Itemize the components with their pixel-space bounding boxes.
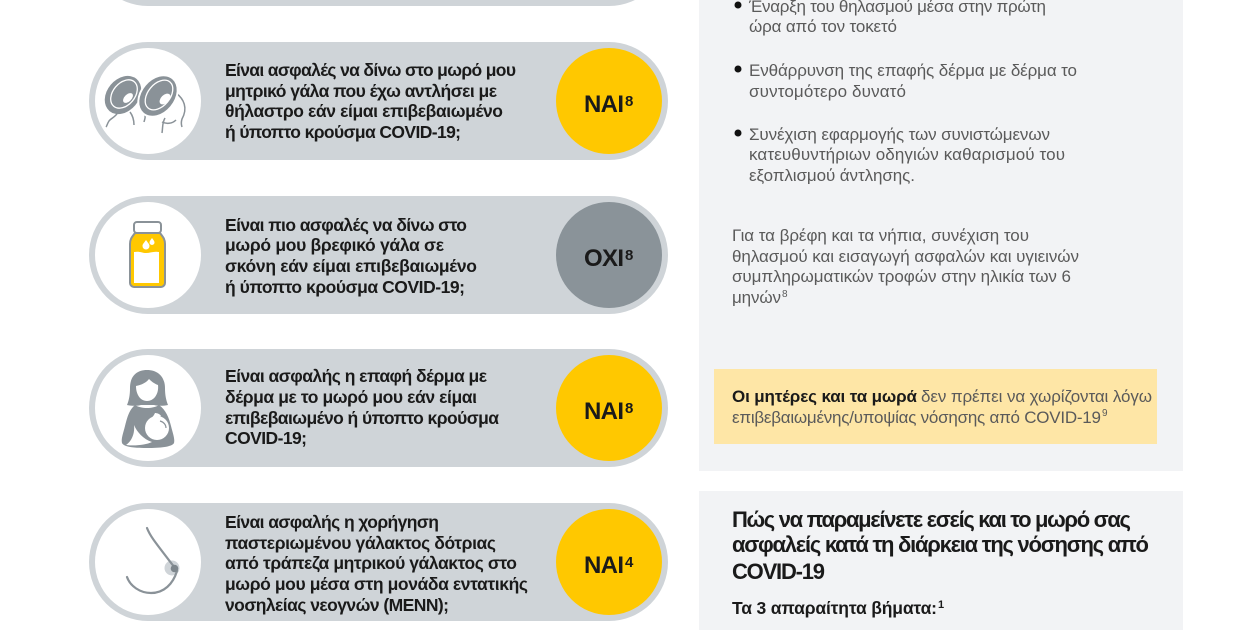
answer: yes: ΝΑΙ — [584, 398, 624, 425]
heading: ασφαλείς κατά τη διάρκεια της νόσησης από — [732, 532, 1149, 557]
question text: παστεριωμένου γάλακτος δότριας — [225, 533, 496, 553]
partial pill cut off at top — [89, 0, 668, 6]
question text: μωρό μου μέσα στη μονάδα εντατικής — [225, 574, 528, 594]
question text: μητρικό γάλα που έχω αντλήσει με — [225, 81, 498, 101]
answer: yes: 4 — [625, 554, 634, 571]
panel: staying safe — [699, 491, 1183, 630]
paragraph: infants and toddlers: Για τα βρέφη και τα νήπια, συνέχιση του — [732, 226, 1029, 245]
callout: δεν πρέπει να χωρίζονται λόγω — [921, 387, 1152, 406]
bullet list: κατευθυντήριων οδηγιών καθαρισμού του — [749, 145, 1065, 164]
question text — [225, 512, 528, 615]
question text: ή ύποπτο κρούσμα COVID-19; — [225, 277, 465, 297]
panel: donor milk question — [89, 503, 668, 621]
subheading: 1 — [938, 599, 944, 611]
bullet list: ώρα από τον τοκετό — [749, 17, 897, 36]
question text — [225, 60, 516, 142]
question text: σκόνη εάν είμαι επιβεβαιωμένο — [225, 256, 477, 276]
callout: Οι μητέρες και τα μωρά — [732, 387, 918, 406]
paragraph: infants and toddlers: θηλασμού και εισαγωγή ασφαλών και υγιεινών — [732, 247, 1079, 266]
question text: δέρμα με το μωρό μου εάν είμαι — [225, 387, 477, 407]
panel: formula question — [89, 196, 668, 314]
answer: no: ΟΧΙ — [584, 245, 624, 272]
callout: 9 — [1102, 408, 1108, 419]
paragraph: infants and toddlers: μηνών — [732, 288, 781, 307]
panel: skin to skin question — [89, 349, 668, 467]
icon: bottle — [130, 222, 165, 287]
icon: breast pump — [97, 66, 187, 133]
answer: no: 8 — [625, 247, 633, 264]
answer: no — [556, 202, 662, 308]
bullet list — [734, 0, 1077, 185]
callout — [714, 369, 1157, 444]
question text: Είναι ασφαλής η επαφή δέρμα με — [225, 366, 488, 386]
question text — [225, 366, 499, 448]
answer: yes — [556, 355, 662, 461]
panel: recommendations — [699, 0, 1183, 471]
question text: από τράπεζα μητρικού γάλακτος στο — [225, 553, 517, 574]
panel: breast pump question — [89, 42, 668, 160]
paragraph: infants and toddlers — [732, 226, 1079, 307]
question text: Είναι πιο ασφαλές να δίνω στο — [225, 215, 467, 235]
heading: COVID-19 — [732, 559, 825, 584]
icon: mother and baby — [122, 370, 174, 448]
icon: breast — [127, 528, 180, 593]
answer: yes: ΝΑΙ — [584, 91, 624, 118]
question text: COVID-19; — [225, 428, 307, 448]
paragraph: infants and toddlers: συμπληρωματικών τροφών στην ηλικία των 6 — [732, 267, 1071, 286]
bullet list: Συνέχιση εφαρμογής των συνιστώμενων — [749, 125, 1050, 144]
question text: Είναι ασφαλής η χορήγηση — [225, 512, 439, 532]
bullet list: εξοπλισμού άντλησης. — [749, 166, 915, 185]
answer: yes: ΝΑΙ — [584, 552, 624, 579]
question text: μωρό μου βρεφικό γάλα σε — [225, 235, 445, 255]
bullet list: Ενθάρρυνση της επαφής δέρμα με δέρμα το — [749, 61, 1077, 80]
question text: Είναι ασφαλές να δίνω στο μωρό μου — [225, 60, 516, 80]
callout: επιβεβαιωμένης/υποψίας νόσησης από COVID-19 — [732, 408, 1101, 427]
subheading: Τα 3 απαραίτητα βήματα: — [732, 598, 937, 618]
paragraph: infants and toddlers: 8 — [782, 289, 788, 300]
question text — [225, 215, 477, 297]
answer: yes: 8 — [625, 93, 633, 110]
heading — [732, 507, 1149, 584]
bullet list: συντομότερο δυνατό — [749, 82, 906, 101]
answer: yes — [556, 509, 662, 615]
question text: επιβεβαιωμένο ή ύποπτο κρούσμα — [225, 408, 499, 428]
question text: θήλαστρο εάν είμαι επιβεβαιωμένο — [225, 101, 503, 121]
answer: yes: 8 — [625, 400, 633, 417]
question text: ή ύποπτο κρούσμα COVID-19; — [225, 122, 461, 142]
heading: Πώς να παραμείνετε εσείς και το μωρό σας — [732, 507, 1131, 532]
question text: νοσηλείας νεογνών (ΜΕΝΝ); — [225, 595, 449, 615]
answer: yes — [556, 48, 662, 154]
